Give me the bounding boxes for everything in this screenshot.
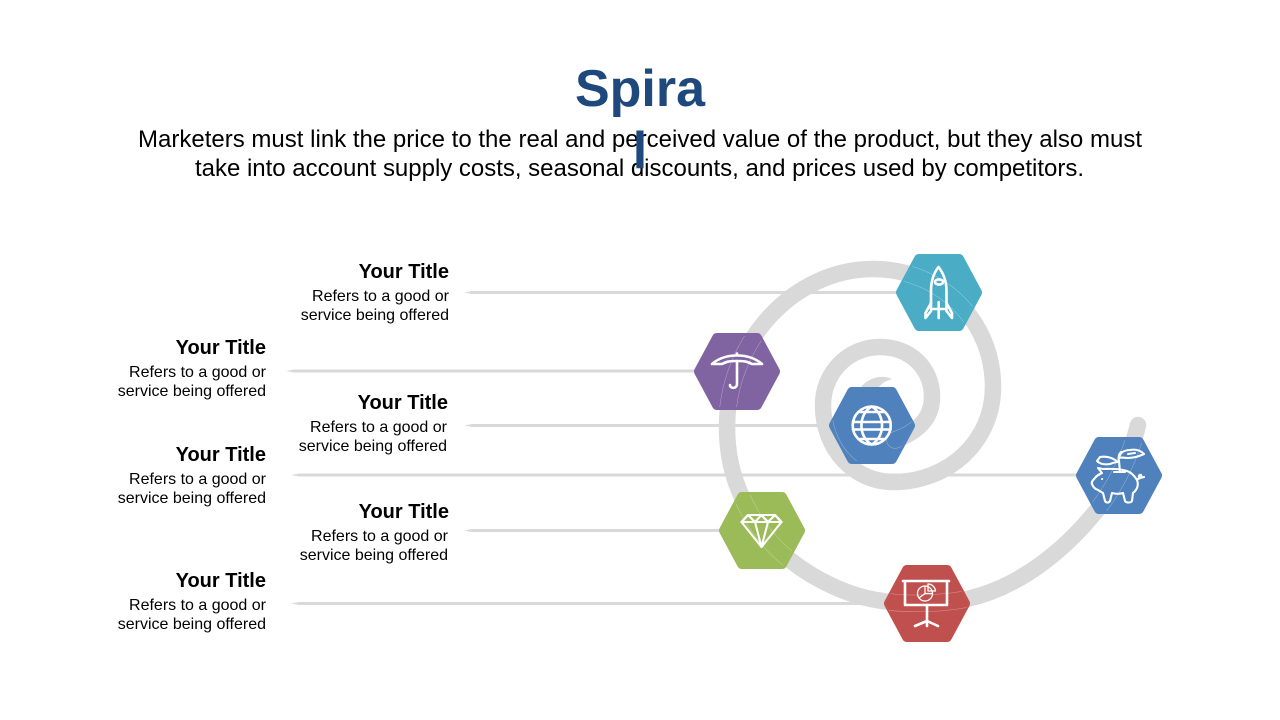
item 4 text: Refers to a good or	[129, 471, 267, 488]
item 2 text: Your Title	[176, 337, 266, 359]
hexagon: diamond	[719, 492, 805, 569]
connector lines	[286, 291, 1082, 605]
icon: diamond	[742, 515, 782, 547]
item 5 text: Refers to a good or	[311, 528, 449, 545]
item 6 text: Your Title	[176, 570, 266, 592]
item 6 text: Refers to a good or	[129, 597, 267, 614]
item 2 text: Refers to a good or	[129, 364, 267, 381]
item 1 text: Your Title	[359, 261, 449, 283]
description text: Marketers must link the price to the real and perceived value of the product, but they also must	[138, 126, 1142, 153]
icon: umbrella	[712, 354, 762, 388]
item 4 text: service being offered	[118, 490, 266, 507]
item 6 text	[118, 570, 267, 633]
item 3 text	[299, 392, 448, 455]
item 1 text	[301, 261, 450, 324]
item 3 text: Your Title	[358, 392, 448, 414]
description text: take into account supply costs, seasonal discounts, and prices used by competitors.	[195, 155, 1084, 182]
title: Spira	[575, 60, 706, 118]
spiral	[727, 269, 1138, 603]
item 1 text: Refers to a good or	[312, 288, 450, 305]
description text	[138, 126, 1142, 182]
item 1 text: service being offered	[301, 307, 449, 324]
icon: presentation board	[903, 581, 949, 626]
icon: globe	[853, 406, 891, 444]
hexagon: globe	[829, 387, 915, 464]
icon: piggy bank	[1092, 450, 1144, 502]
item 5 text: Your Title	[359, 501, 449, 523]
item 5 text: service being offered	[300, 547, 448, 564]
item 4 text: Your Title	[176, 444, 266, 466]
item 6 text: service being offered	[118, 616, 266, 633]
item 2 text: service being offered	[118, 383, 266, 400]
hexagon: presentation	[884, 565, 970, 642]
item 2 text	[118, 337, 267, 400]
title wrapped letter: l	[633, 122, 647, 180]
item 3 text: service being offered	[299, 438, 447, 455]
hexagon: piggy bank	[1076, 437, 1162, 514]
hexagon: umbrella	[694, 333, 780, 410]
item 4 text	[118, 444, 267, 507]
icon: rocket	[926, 267, 952, 318]
item 5 text	[300, 501, 449, 564]
item 3 text: Refers to a good or	[310, 419, 448, 436]
hexagon: rocket	[896, 254, 982, 331]
